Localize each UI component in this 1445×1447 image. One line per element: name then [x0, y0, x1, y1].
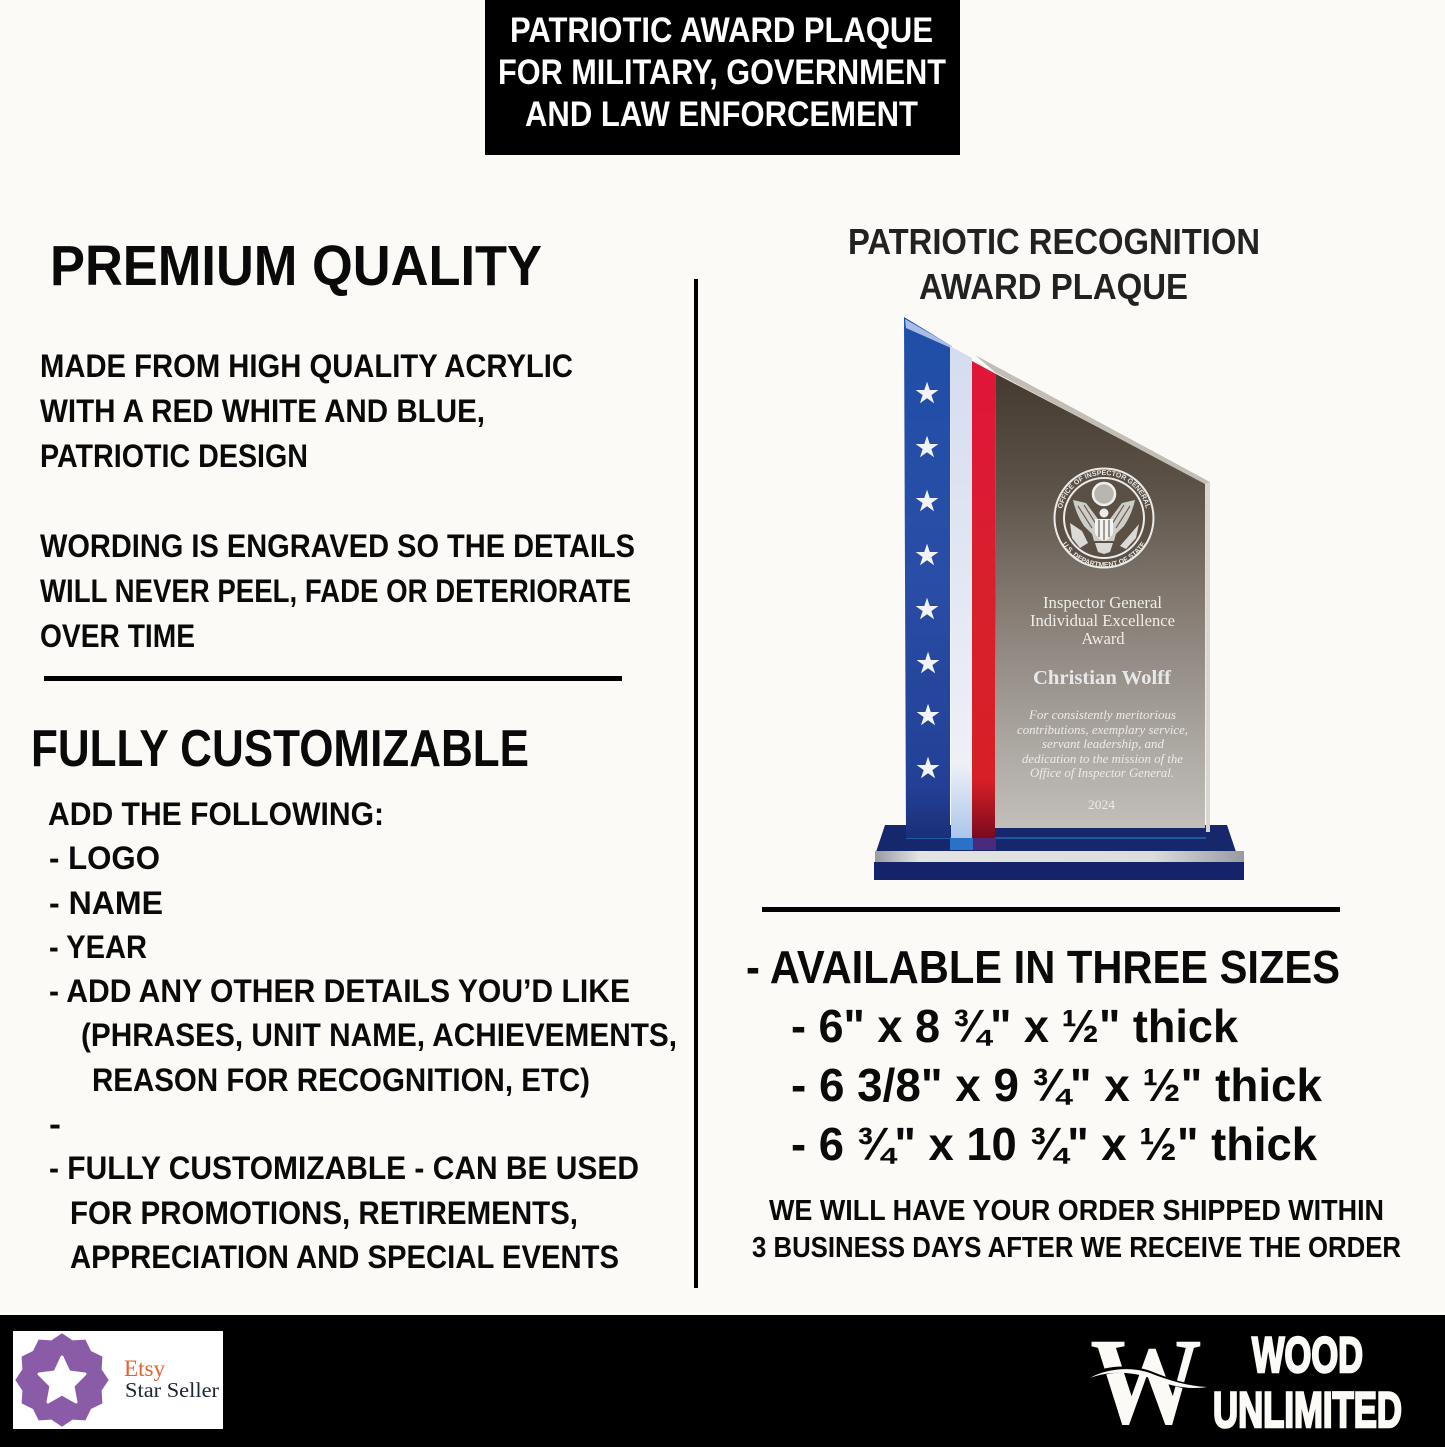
text block: shipping note: WE WILL HAVE YOUR ORDER SHIPPED WITHIN — [769, 1195, 1384, 1227]
text block: available sizes: - 6 ¾" x 10 ¾" x ½" thick — [791, 1118, 1317, 1170]
plaque engraved text — [1017, 593, 1188, 812]
text block: shipping note — [752, 1195, 1401, 1264]
plaque engraved text: 2024 — [1088, 797, 1116, 812]
heading: plaque name: PATRIOTIC RECOGNITION — [848, 221, 1260, 262]
plaque stripes — [904, 317, 996, 838]
title banner: PATRIOTIC AWARD PLAQUE — [510, 11, 933, 50]
plaque engraved panel — [975, 355, 1210, 832]
text block: quality description: MADE FROM HIGH QUALITY ACRYLIC — [40, 348, 573, 384]
text block: quality description — [40, 348, 635, 654]
text block: available sizes: - AVAILABLE IN THREE SIZES — [746, 941, 1340, 993]
text block: customization list: FOR PROMOTIONS, RETIREMENTS, — [70, 1195, 578, 1231]
plaque base — [874, 825, 1244, 880]
plaque stars: ★ — [916, 648, 940, 678]
icon: engraved seal: U.S. DEPARTMENT OF STATE — [1063, 542, 1145, 566]
plaque engraved text: Christian Wolff — [1033, 667, 1171, 689]
plaque engraved text: Individual Excellence — [1030, 611, 1175, 630]
text block: customization list: (PHRASES, UNIT NAME, ACHIEVEMENTS, — [81, 1017, 677, 1053]
text block: available sizes — [746, 941, 1340, 1170]
plaque stars: ★ — [915, 432, 939, 462]
logo mark: W — [1090, 1313, 1202, 1447]
text block: quality description: WILL NEVER PEEL, FADE OR DETERIORATE — [40, 573, 631, 609]
text block: customization list: APPRECIATION AND SPECIAL EVENTS — [70, 1239, 619, 1275]
plaque stars: ★ — [916, 753, 940, 783]
plaque engraved text: servant leadership, and — [1042, 736, 1164, 751]
icon: engraved seal — [1054, 468, 1154, 568]
text block: available sizes: - 6" x 8 ¾" x ½" thick — [791, 1000, 1238, 1052]
heading: premium quality: PREMIUM QUALITY — [50, 234, 542, 298]
text block: quality description: WITH A RED WHITE AND BLUE, — [40, 393, 485, 429]
badge: etsy star seller: Etsy — [124, 1356, 166, 1381]
heading: plaque name: AWARD PLAQUE — [919, 266, 1188, 307]
plaque engraved text: Inspector General — [1043, 593, 1162, 612]
plaque stars — [915, 378, 940, 783]
plaque engraved text: contributions, exemplary service, — [1017, 722, 1188, 737]
heading: plaque name — [848, 221, 1260, 307]
plaque stars: ★ — [915, 486, 939, 516]
text block: customization list: - FULLY CUSTOMIZABLE - CAN BE USED — [49, 1150, 639, 1186]
plaque stars: ★ — [915, 540, 939, 570]
badge: etsy star seller — [13, 1331, 223, 1429]
text block: quality description: PATRIOTIC DESIGN — [40, 438, 308, 474]
footer bar — [0, 1313, 1445, 1447]
text block: customization list: REASON FOR RECOGNITION, ETC) — [92, 1062, 590, 1098]
heading: fully customizable: FULLY CUSTOMIZABLE — [31, 720, 529, 778]
text block: customization list: - NAME — [49, 885, 163, 921]
text block: customization list: - YEAR — [49, 929, 147, 965]
logo: wood unlimited — [1090, 1313, 1402, 1447]
text block: available sizes: - 6 3/8" x 9 ¾" x ½" thick — [791, 1059, 1322, 1111]
text block: quality description: WORDING IS ENGRAVED SO THE DETAILS — [40, 528, 635, 564]
logo: wood unlimited: WOOD — [1252, 1327, 1363, 1383]
icon: engraved seal: OFFICE OF INSPECTOR GENERAL — [1058, 470, 1150, 508]
text block: customization list: - LOGO — [49, 840, 160, 876]
text block: customization list — [48, 796, 677, 1275]
plaque stars: ★ — [915, 378, 939, 408]
plaque engraved text: dedication to the mission of the — [1022, 751, 1183, 766]
plaque stars: ★ — [915, 594, 939, 624]
text block: customization list: - — [49, 1106, 61, 1142]
title banner: FOR MILITARY, GOVERNMENT — [498, 53, 946, 92]
icon: purple star badge — [15, 1333, 109, 1427]
plaque stars: ★ — [916, 700, 940, 730]
plaque engraved text: Award — [1082, 629, 1125, 648]
plaque engraved text: For consistently meritorious — [1028, 707, 1176, 722]
text block: customization list: ADD THE FOLLOWING: — [48, 796, 384, 832]
text block: quality description: OVER TIME — [40, 618, 195, 654]
title banner: AND LAW ENFORCEMENT — [525, 95, 918, 134]
text block: customization list: - ADD ANY OTHER DETAILS YOU’D LIKE — [49, 973, 630, 1009]
plaque engraved text: Office of Inspector General. — [1030, 765, 1174, 780]
badge: etsy star seller: Star Seller — [125, 1378, 219, 1402]
product photo: award plaque — [874, 317, 1244, 880]
title banner — [485, 0, 960, 155]
